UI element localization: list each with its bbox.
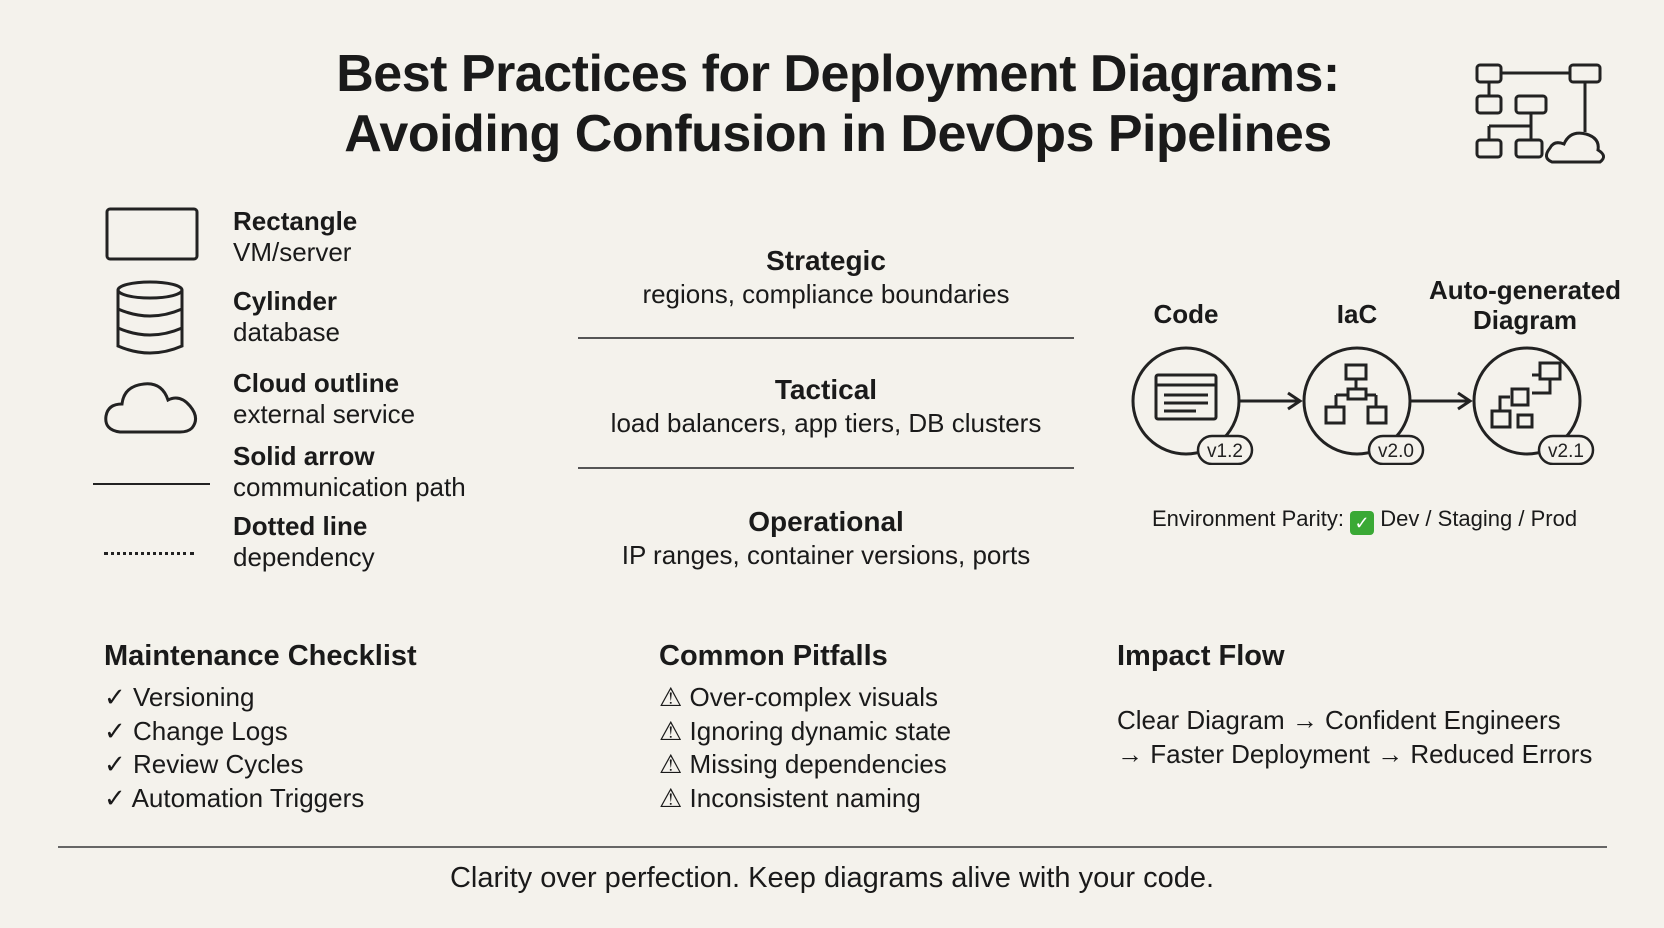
- operational: Operational: [748, 506, 904, 537]
- maintenance checklist: ✓ Versioning: [104, 682, 254, 712]
- title: Avoiding Confusion in DevOps Pipelines: [344, 105, 1332, 163]
- icon: rectangle: [106, 208, 198, 260]
- labels: Auto-generated: [1429, 275, 1621, 305]
- strategic: [642, 245, 1010, 309]
- label: solid arrow: Solid arrow: [233, 441, 375, 471]
- circles diagram: v2.0: [1378, 441, 1414, 462]
- impact flow: [1117, 640, 1592, 768]
- label: solid arrow: communication path: [233, 472, 466, 502]
- circles diagram: v2.1: [1548, 441, 1584, 462]
- tactical: Tactical: [775, 374, 877, 405]
- label: cloud: [233, 368, 415, 429]
- icon: cloud: [104, 382, 198, 434]
- legend: [93, 206, 466, 572]
- label: dotted: Dotted line: [233, 511, 367, 541]
- common pitfalls: ⚠ Inconsistent naming: [659, 782, 921, 812]
- environment parity: ✓: [1355, 513, 1370, 533]
- labels: Code: [1154, 299, 1218, 329]
- label: cylinder: [233, 286, 340, 347]
- label: rectangle: Rectangle: [233, 206, 357, 236]
- operational: [622, 506, 1030, 570]
- tactical: [611, 374, 1041, 438]
- icon: solid line: [93, 483, 210, 485]
- maintenance checklist: Maintenance Checklist: [104, 640, 417, 672]
- tactical: load balancers, app tiers, DB clusters: [611, 408, 1041, 438]
- icon: network diagram: [1476, 64, 1605, 164]
- label: rectangle: VM/server: [233, 237, 351, 267]
- impact flow: Impact Flow: [1117, 640, 1285, 672]
- label: dotted: dependency: [233, 542, 375, 572]
- label: cylinder: database: [233, 317, 340, 347]
- common pitfalls: ⚠ Over-complex visuals: [659, 682, 938, 712]
- circles diagram: v1.2: [1207, 441, 1243, 462]
- operational: IP ranges, container versions, ports: [622, 540, 1030, 570]
- footer: Clarity over perfection. Keep diagrams alive with your code.: [450, 862, 1214, 894]
- pipeline flow: [1132, 275, 1621, 535]
- environment parity: Environment Parity: Dev / Staging / Prod: [1152, 506, 1577, 531]
- strategic: Strategic: [766, 245, 886, 276]
- common pitfalls: [659, 640, 951, 812]
- icon: cylinder: [116, 280, 184, 354]
- maintenance checklist: ✓ Review Cycles: [104, 749, 304, 779]
- maintenance checklist: ✓ Automation Triggers: [104, 782, 364, 812]
- strategic: regions, compliance boundaries: [642, 279, 1010, 309]
- label: cloud: Cloud outline: [233, 368, 399, 398]
- label: solid arrow: [233, 441, 466, 502]
- label: cloud: external service: [233, 399, 415, 429]
- common pitfalls: ⚠ Missing dependencies: [659, 749, 947, 779]
- common pitfalls: Common Pitfalls: [659, 640, 888, 672]
- icon: dotted line: [104, 552, 194, 555]
- maintenance checklist: [104, 640, 417, 812]
- label: dotted: [233, 511, 375, 572]
- labels: Diagram: [1473, 305, 1577, 335]
- impact flow: → Faster Deployment → Reduced Errors: [1117, 738, 1592, 768]
- title: [336, 45, 1340, 163]
- impact flow: Clear Diagram → Confident Engineers: [1117, 705, 1561, 735]
- label: cylinder: Cylinder: [233, 286, 337, 316]
- labels: IaC: [1337, 299, 1377, 329]
- title: Best Practices for Deployment Diagrams:: [336, 45, 1340, 103]
- label: rectangle: [233, 206, 357, 267]
- maintenance checklist: ✓ Change Logs: [104, 716, 288, 746]
- layers: [578, 245, 1074, 570]
- labels: [1154, 275, 1621, 335]
- circles diagram: [1132, 346, 1594, 465]
- common pitfalls: ⚠ Ignoring dynamic state: [659, 716, 951, 746]
